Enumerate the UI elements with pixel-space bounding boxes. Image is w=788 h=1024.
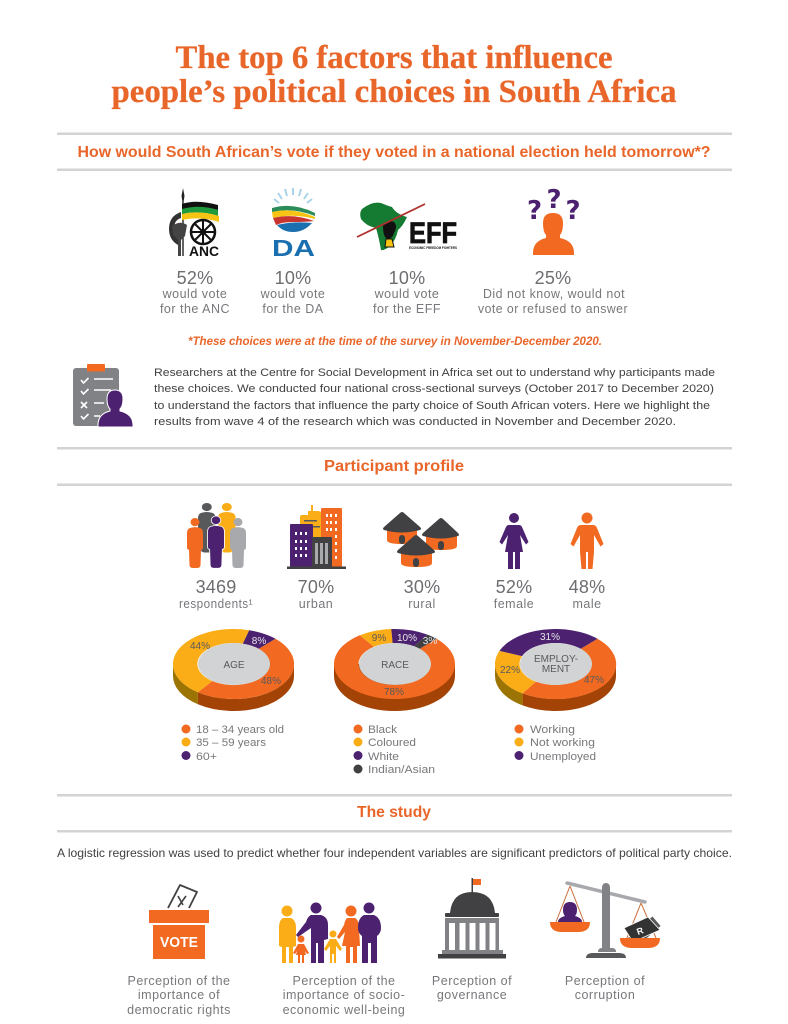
text: party percentages: would vote <box>162 287 227 301</box>
text: party percentages: 10% <box>275 268 311 288</box>
text: profile numbers: respondents¹ <box>179 597 253 611</box>
chart: race donut: 9% <box>372 633 386 644</box>
legend: age: 35 – 59 years <box>196 737 266 749</box>
icon: scales with bribe <box>550 883 664 958</box>
text: profile numbers: male <box>572 597 602 611</box>
legend: employment: Not working <box>530 737 595 749</box>
legend: employment: Unemployed <box>530 751 596 763</box>
icon: ballot box <box>149 885 209 959</box>
chart: age donut: 8% <box>252 636 266 647</box>
icon: male <box>570 512 604 569</box>
chart: race donut: 10% <box>397 633 417 644</box>
legend: race: White <box>368 751 399 763</box>
chart: race donut: 3% <box>423 636 437 647</box>
text: profile numbers <box>179 577 605 611</box>
icon: clipboard and researcher <box>73 364 133 427</box>
text: variables captions: importance of <box>138 988 220 1002</box>
text block: study description: A logistic regression was used to predict whether four independent variables are significant predictors of political party choice. <box>57 846 732 860</box>
text: party percentages: for the DA <box>262 302 324 316</box>
chart: race donut <box>334 629 455 711</box>
text: party percentages: 10% <box>389 268 425 288</box>
text: profile numbers: female <box>494 597 534 611</box>
icon: female <box>500 513 528 569</box>
text: profile numbers: 3469 <box>196 577 236 597</box>
icon: DA logo <box>272 188 315 261</box>
heading: participant profile: Participant profile <box>324 458 464 475</box>
title <box>112 40 676 110</box>
text: party percentages: would vote <box>260 287 325 301</box>
text: variables captions: Perception of <box>432 974 512 988</box>
title: The top 6 factors that influence <box>176 40 612 76</box>
text: variables captions: corruption <box>575 988 635 1002</box>
text: variables captions: democratic rights <box>127 1003 231 1017</box>
text block: research description: results from wave 4 of the research which was conducted in November and December 2020. <box>154 416 676 428</box>
icon: EFF logo <box>357 203 457 250</box>
icon: unsure person: ? <box>546 185 562 215</box>
text: party percentages: for the ANC <box>160 302 230 316</box>
icon: ANC logo: ANC <box>189 243 219 259</box>
legend: race <box>354 724 435 776</box>
icon: urban buildings <box>287 505 346 569</box>
legend: age: 18 – 34 years old <box>196 724 284 736</box>
text: profile numbers: 48% <box>569 577 605 597</box>
text: party percentages: Did not know, would not <box>483 287 625 301</box>
legend: age: 60+ <box>196 751 217 763</box>
text: variables captions: Perception of <box>565 974 645 988</box>
legend: race: Indian/Asian <box>368 764 435 776</box>
text: party percentages <box>160 268 628 316</box>
legend: employment <box>514 724 596 763</box>
legend: race: Coloured <box>368 737 416 749</box>
chart: age donut: 48% <box>261 676 281 687</box>
chart: employment donut <box>495 629 616 711</box>
icon: unsure person <box>527 185 581 255</box>
text: party percentages: 52% <box>177 268 213 288</box>
text block: research description <box>154 367 715 428</box>
text block: research description: these choices. We conducted four national cross-sectional surveys (October 2017 to December 2020) <box>154 383 714 395</box>
note: *These choices were at the time of the survey in November-December 2020. <box>188 336 602 348</box>
icon: EFF logo: ECONOMIC FREEDOM FIGHTERS <box>409 245 457 250</box>
icon: unsure person: ? <box>565 196 581 226</box>
text: profile numbers: 70% <box>298 577 334 597</box>
icon: rural huts <box>383 512 459 567</box>
icon: EFF logo: EFF <box>409 217 457 250</box>
icon: government building <box>438 878 506 958</box>
legend: race: Black <box>368 724 397 736</box>
text: profile numbers: rural <box>408 597 436 611</box>
icon: unsure person: ? <box>527 196 542 226</box>
text block: research description: to understand the factors that influence the party choice of South African voters. Here we highlight the <box>154 400 710 412</box>
icon: family <box>279 902 381 963</box>
text: party percentages: would vote <box>374 287 439 301</box>
icon: respondents group <box>187 503 246 568</box>
icon: scales with bribe: R <box>635 925 645 937</box>
chart: employment donut: MENT <box>542 664 570 675</box>
text: variables captions: importance of socio- <box>283 988 405 1002</box>
chart: employment donut: 31% <box>540 632 560 643</box>
chart: employment donut: 47% <box>584 675 604 686</box>
chart: age donut: AGE <box>223 660 245 671</box>
icon: ANC logo <box>169 188 219 259</box>
chart: age donut: 44% <box>190 641 210 652</box>
text: party percentages: 25% <box>535 268 571 288</box>
text: variables captions: economic well-being <box>283 1003 405 1017</box>
chart: race donut: 78% <box>384 687 404 698</box>
text: party percentages: vote or refused to answer <box>478 302 628 316</box>
text: profile numbers: 30% <box>404 577 440 597</box>
legend: age <box>182 724 284 763</box>
heading: voting question: How would South African’s vote if they voted in a national election held tomorrow*? <box>78 144 710 161</box>
text: variables captions: governance <box>437 988 507 1002</box>
chart: age donut <box>173 629 294 711</box>
panel: party results <box>160 185 628 316</box>
text: party percentages: for the EFF <box>373 302 441 316</box>
chart: employment donut: EMPLOY- <box>534 654 578 665</box>
heading: the study: The study <box>357 804 431 821</box>
icon: ballot box: VOTE <box>160 935 198 951</box>
legend: employment: Working <box>530 724 575 736</box>
text: profile numbers: urban <box>299 597 333 611</box>
title: people’s political choices in South Africa <box>112 74 676 110</box>
text: variables captions: Perception of the <box>292 974 396 988</box>
icon: DA logo: DA <box>272 235 315 261</box>
text: profile numbers: 52% <box>496 577 532 597</box>
text: variables captions <box>127 974 645 1017</box>
text: variables captions: Perception of the <box>127 974 231 988</box>
chart: employment donut: 22% <box>500 665 520 676</box>
text block: research description: Researchers at the Centre for Social Development in Africa set out to understand why participants made <box>154 367 715 379</box>
chart: race donut: RACE <box>381 660 409 671</box>
